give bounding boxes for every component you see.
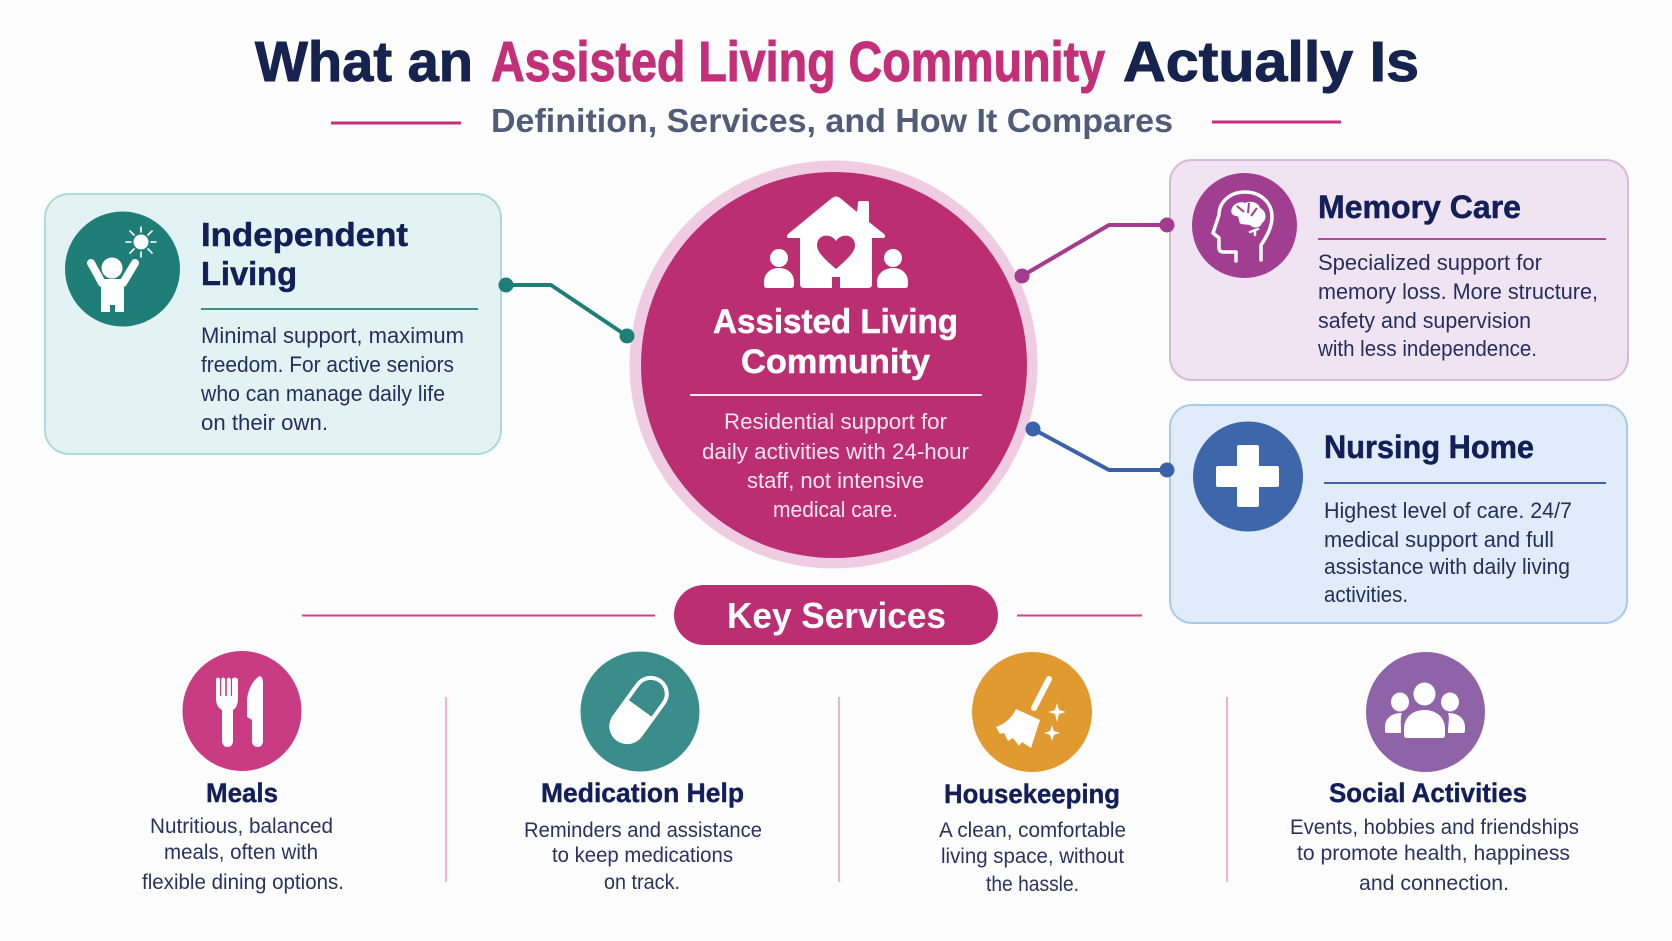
description: living space, without — [941, 845, 1124, 868]
service: social activities — [1290, 652, 1579, 895]
heading: Community — [741, 343, 930, 381]
heading: Independent — [201, 216, 408, 253]
description — [939, 819, 1126, 896]
description — [200, 323, 464, 435]
panel: nursing home — [1170, 405, 1627, 623]
icon: house with heart and people — [764, 196, 908, 288]
description: Minimal support, maximum — [201, 323, 464, 348]
heading: Nursing Home — [1324, 429, 1534, 465]
subtitle: Definition, Services, and How It Compares — [491, 102, 1173, 139]
description: and connection. — [1359, 872, 1509, 895]
service: meals — [142, 651, 344, 894]
description: Residential support for — [724, 409, 947, 434]
label: Meals — [206, 778, 278, 808]
description: Specialized support for — [1318, 250, 1542, 275]
heading — [201, 216, 408, 292]
label: Housekeeping — [944, 779, 1120, 809]
description — [1317, 250, 1598, 361]
label: Medication Help — [541, 778, 744, 808]
description: with less independence. — [1317, 336, 1537, 361]
description: Nutritious, balanced — [150, 815, 333, 838]
heading: Living — [201, 255, 297, 292]
description: the hassle. — [986, 873, 1079, 896]
description: to promote health, happiness — [1297, 842, 1570, 865]
heading — [713, 303, 958, 381]
description: activities. — [1324, 582, 1408, 607]
heading: Memory Care — [1318, 189, 1521, 225]
service: medication help — [524, 652, 762, 894]
title — [255, 30, 1419, 94]
icon: capsule — [580, 652, 700, 772]
description — [1290, 816, 1579, 895]
description: Reminders and assistance — [524, 819, 762, 842]
description: on their own. — [201, 410, 328, 435]
description: who can manage daily life — [200, 381, 445, 406]
title: Assisted Living Community — [491, 30, 1105, 94]
description — [142, 815, 344, 894]
connector: memory care — [1014, 218, 1174, 284]
description: to keep medications — [552, 844, 733, 867]
service: housekeeping — [939, 652, 1126, 896]
description — [702, 409, 969, 522]
icon: broom and sparkles — [972, 652, 1092, 772]
description: on track. — [604, 871, 680, 894]
description: assistance with daily living — [1324, 554, 1570, 579]
description: daily activities with 24-hour — [702, 439, 969, 464]
description: medical care. — [773, 497, 898, 522]
icon: brain in head — [1192, 173, 1297, 278]
description: Events, hobbies and friendships — [1290, 816, 1579, 839]
panel: memory care — [1170, 160, 1628, 380]
description: medical support and full — [1324, 527, 1554, 552]
title: Actually Is — [1123, 30, 1419, 94]
description: meals, often with — [164, 841, 318, 864]
description — [524, 819, 762, 894]
description: staff, not intensive — [747, 468, 924, 493]
heading: key services: Key Services — [727, 595, 946, 636]
description: Highest level of care. 24/7 — [1324, 498, 1572, 523]
heading: Assisted Living — [713, 303, 958, 341]
icon: person with sun — [65, 212, 180, 326]
description — [1324, 498, 1572, 607]
title: What an — [255, 30, 473, 94]
label: Social Activities — [1329, 778, 1527, 808]
icon: group of people — [1366, 652, 1485, 772]
description: freedom. For active seniors — [201, 352, 454, 377]
heading: key services — [302, 585, 1142, 645]
description: safety and supervision — [1318, 308, 1531, 333]
center circle: assisted living community — [630, 160, 1038, 568]
icon: fork and knife — [182, 651, 302, 771]
icon: medical cross — [1193, 422, 1303, 532]
connector: nursing home — [1026, 422, 1174, 478]
description: flexible dining options. — [142, 871, 344, 894]
panel: independent living — [45, 194, 501, 454]
connector: independent living — [498, 278, 634, 344]
description: A clean, comfortable — [939, 819, 1126, 842]
description: memory loss. More structure, — [1318, 279, 1598, 304]
